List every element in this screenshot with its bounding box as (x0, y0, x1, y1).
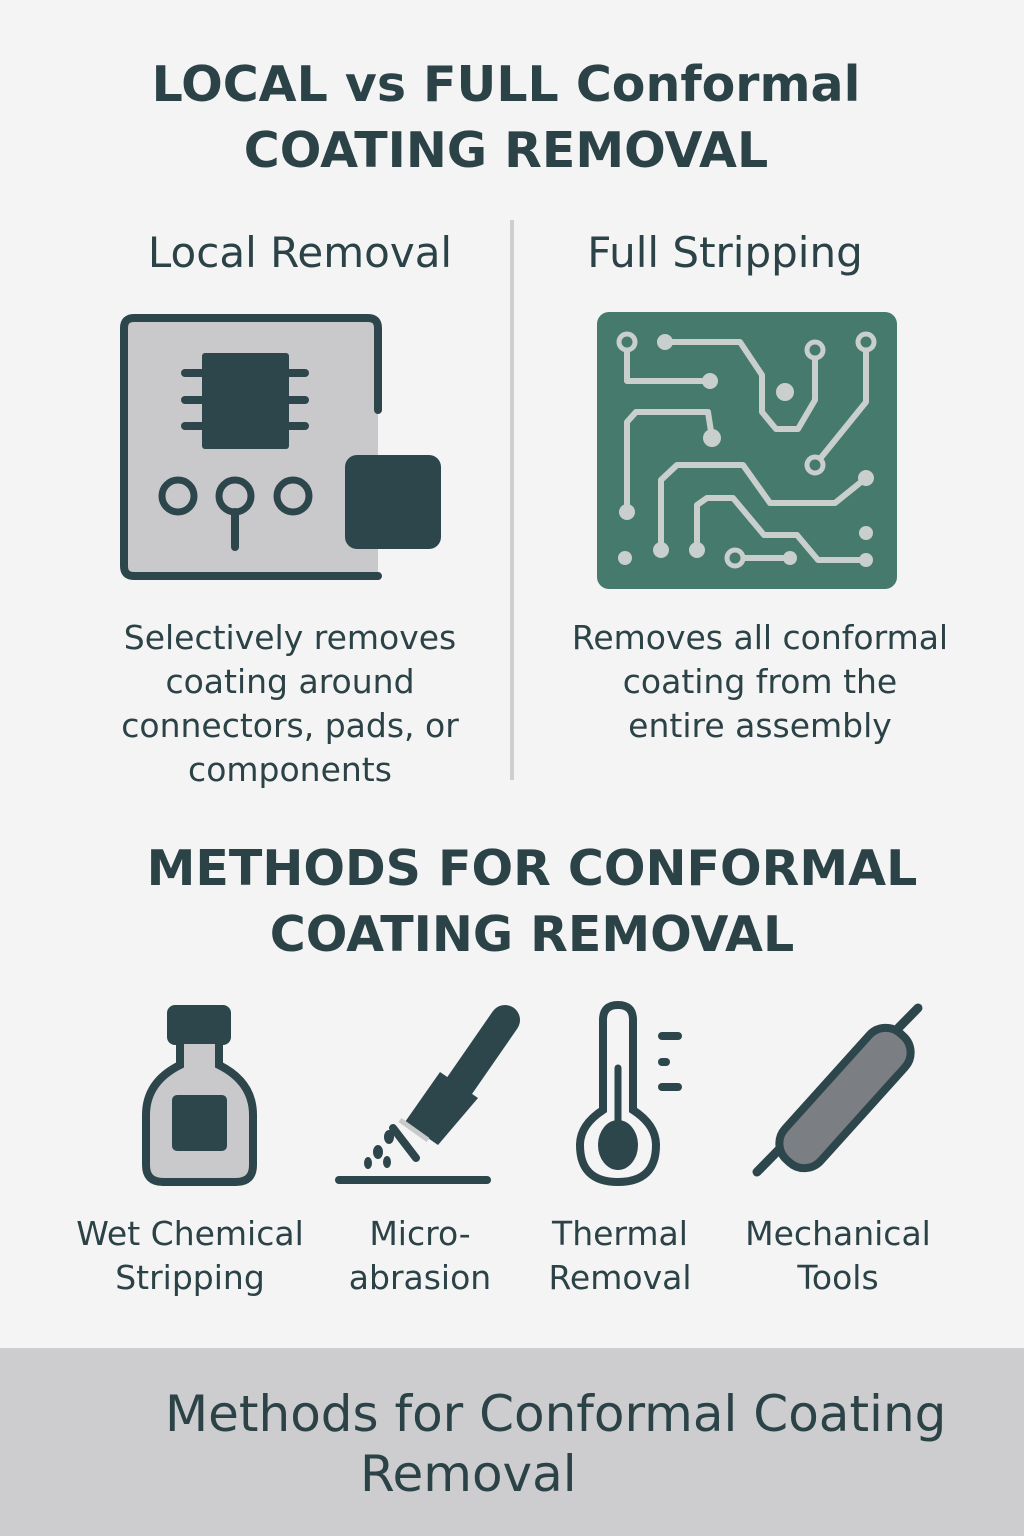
icon: local board (120, 314, 441, 580)
heading: methods: METHODS FOR CONFORMAL (147, 840, 917, 897)
heading: methods: COATING REMOVAL (270, 906, 794, 963)
icon: full pcb (597, 312, 897, 589)
text: local description: components (188, 750, 392, 789)
icon: bottle (146, 1005, 253, 1182)
label: thermal: Removal (548, 1258, 692, 1297)
title: LOCAL vs FULL Conformal (152, 56, 860, 113)
text: full description (572, 618, 948, 745)
title (152, 56, 860, 179)
text: local description: Selectively removes (124, 618, 456, 657)
label: thermal: Thermal (552, 1214, 688, 1253)
icon: micro-abrasion (339, 1020, 505, 1180)
footer band (0, 1348, 1024, 1536)
text: full description: entire assembly (628, 706, 892, 745)
icon: mechanical tool (757, 1008, 920, 1177)
icon: thermometer (580, 1005, 678, 1182)
text: local description (121, 618, 459, 789)
label: wet chemical: Stripping (115, 1258, 265, 1297)
text: local description: coating around (165, 662, 415, 701)
label: mechanical (745, 1214, 931, 1297)
label: micro-abrasion (349, 1214, 491, 1297)
heading: methods (147, 840, 917, 963)
text: full description: coating from the (623, 662, 897, 701)
label: mechanical: Mechanical (745, 1214, 931, 1253)
label: wet chemical: Wet Chemical (76, 1214, 304, 1253)
footer text (165, 1385, 946, 1503)
label: mechanical: Tools (797, 1258, 879, 1297)
heading: local removal: Local Removal (148, 228, 452, 277)
label: micro-abrasion: Micro- (369, 1214, 471, 1253)
icons: methods (142, 1001, 922, 1186)
heading: full stripping: Full Stripping (587, 228, 863, 277)
text: local description: connectors, pads, or (121, 706, 459, 745)
title: COATING REMOVAL (244, 122, 768, 179)
text: full description: Removes all conformal (572, 618, 948, 657)
divider (510, 220, 514, 780)
label: micro-abrasion: abrasion (349, 1258, 491, 1297)
label: thermal (548, 1214, 692, 1297)
footer text: Removal (360, 1445, 577, 1503)
label: wet chemical (76, 1214, 304, 1297)
footer text: Methods for Conformal Coating (165, 1385, 946, 1443)
